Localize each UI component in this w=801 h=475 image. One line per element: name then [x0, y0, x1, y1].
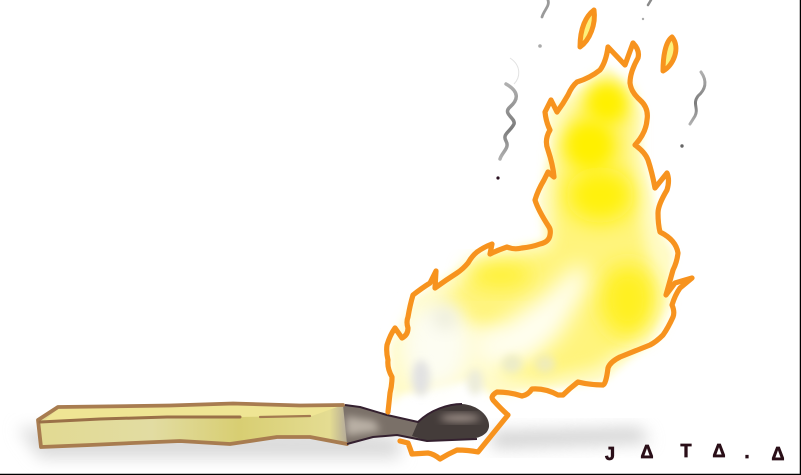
head highlight [440, 414, 480, 422]
flying spark left [580, 10, 594, 47]
stick outline [38, 404, 347, 447]
ground shadows [18, 428, 650, 458]
signature: Δ [772, 444, 785, 464]
smoke wisp right [680, 72, 705, 148]
flying spark right [663, 37, 676, 71]
signature: . [744, 442, 750, 462]
match head [412, 404, 489, 441]
signature: Δ [713, 441, 726, 461]
smoke wisp top [538, 0, 651, 48]
signature: T [680, 441, 692, 461]
stick top face [44, 405, 340, 421]
neck highlight [346, 416, 380, 436]
stick body [38, 404, 362, 447]
flame outline [387, 43, 692, 459]
char outline [345, 404, 477, 444]
charred neck [343, 405, 430, 444]
stick grain line [260, 416, 310, 417]
smoke wisp left [496, 58, 519, 180]
matchstick [38, 404, 489, 447]
signature [605, 441, 785, 464]
flame glow [390, 66, 674, 405]
signature: J [605, 444, 615, 464]
signature: Δ [641, 442, 654, 462]
stick inner edge [40, 417, 240, 422]
